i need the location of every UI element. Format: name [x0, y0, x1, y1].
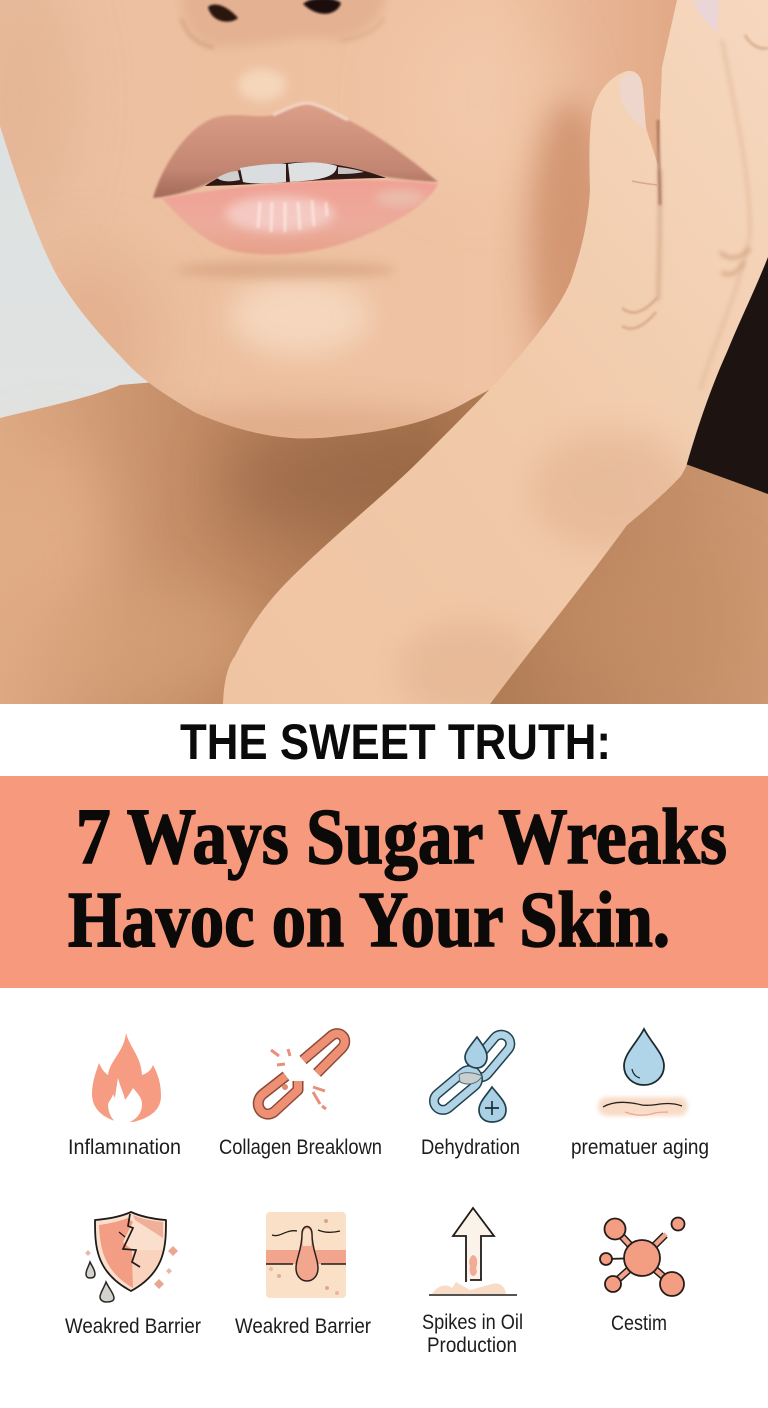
panel: salmon title band	[0, 776, 768, 988]
hand	[223, 0, 768, 720]
label: Dehydration	[421, 1136, 520, 1159]
icon: chain with drops	[430, 1031, 514, 1122]
label: Cestim	[611, 1312, 667, 1335]
icon: broken chain	[258, 1034, 345, 1114]
label	[422, 1311, 523, 1357]
label: Weakred Barrier	[65, 1315, 201, 1338]
item: clogged pore	[235, 1212, 371, 1338]
label: Inflamınation	[68, 1136, 181, 1159]
item: collagen breakdown	[219, 1034, 382, 1159]
icon: water drop on skin	[598, 1029, 688, 1116]
label: Spikes in Oil	[422, 1311, 523, 1334]
label: Collagen Breaklown	[219, 1136, 382, 1159]
item: premature aging	[571, 1029, 709, 1159]
icon: cracked shield	[85, 1212, 178, 1302]
nose	[180, 0, 386, 48]
label: Weakred Barrier	[235, 1315, 371, 1338]
icon: up arrow	[429, 1208, 517, 1295]
finger gap shadow	[658, 120, 660, 205]
item: dehydration	[421, 1031, 520, 1159]
heading: the sweet truth: THE SWEET TRUTH:	[180, 714, 611, 770]
icon: flame	[92, 1033, 161, 1122]
face	[0, 0, 700, 448]
lips	[153, 103, 438, 255]
item: weakened barrier	[65, 1212, 201, 1338]
neck and shoulders	[0, 382, 768, 704]
icon: molecule	[600, 1218, 684, 1296]
item: spikes in oil production	[422, 1208, 523, 1357]
item: cestim	[600, 1218, 684, 1335]
label: Production	[427, 1334, 517, 1357]
hair	[686, 257, 768, 494]
title line 2: Havoc on Your Skin.	[68, 877, 670, 964]
label: prematuer aging	[571, 1136, 709, 1159]
item: inflammation	[68, 1033, 181, 1159]
icon: skin cross-section	[266, 1212, 346, 1298]
photo: lips, chin and hand close-up	[0, 0, 768, 720]
